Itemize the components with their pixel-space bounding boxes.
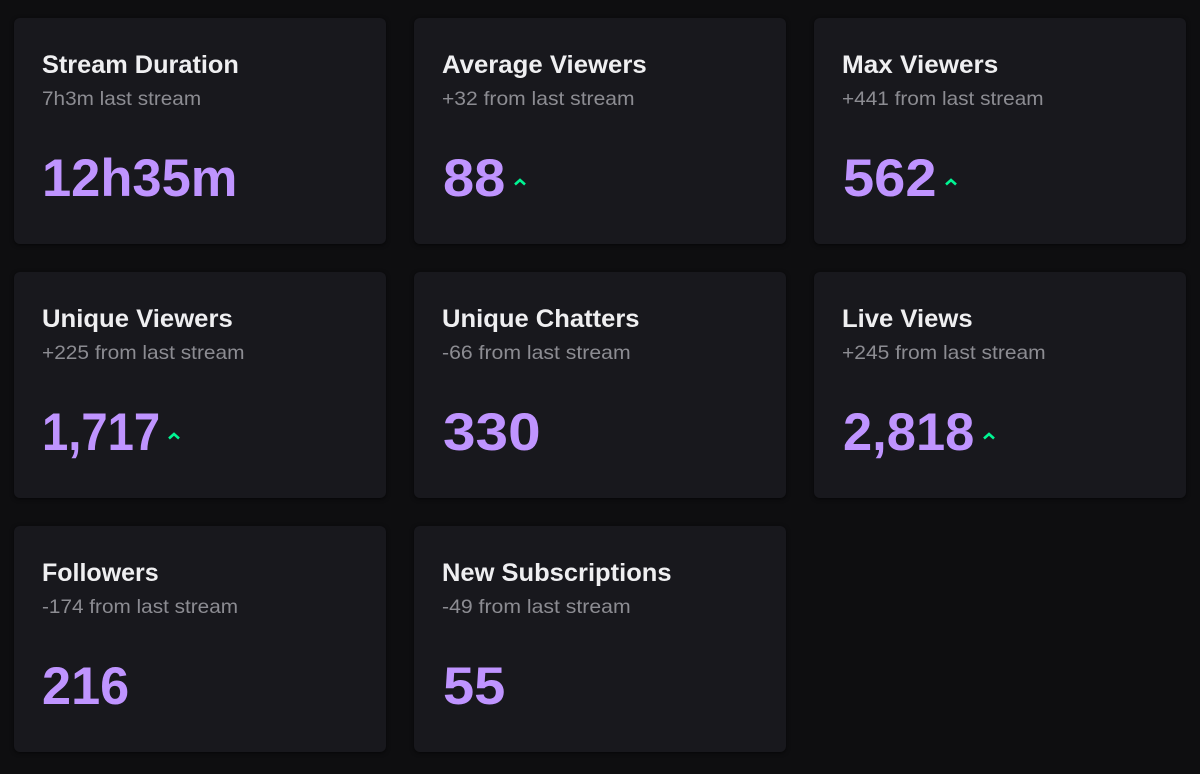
panel: Followers bbox=[14, 526, 386, 752]
heading: Live Views bbox=[842, 305, 973, 333]
icon: green up arrow bbox=[983, 432, 995, 440]
panel: Unique Chatters bbox=[414, 272, 786, 498]
comparison text: -49 from last stream bbox=[442, 596, 631, 618]
panel: Unique Viewers bbox=[14, 272, 386, 498]
icon: green up arrow bbox=[514, 178, 526, 186]
panel: New Subscriptions bbox=[414, 526, 786, 752]
heading: New Subscriptions bbox=[442, 559, 672, 587]
icon: green up arrow bbox=[168, 432, 180, 440]
value: 12h35m bbox=[42, 149, 237, 208]
value: 330 bbox=[443, 403, 541, 462]
comparison text: -174 from last stream bbox=[42, 596, 238, 618]
comparison text: +245 from last stream bbox=[842, 342, 1046, 364]
icon: green up arrow bbox=[945, 178, 957, 186]
panel: Max Viewers bbox=[814, 18, 1186, 244]
heading: Followers bbox=[42, 559, 159, 587]
value: 55 bbox=[443, 657, 505, 716]
panel: Live Views bbox=[814, 272, 1186, 498]
heading: Unique Chatters bbox=[442, 305, 640, 333]
comparison text: +225 from last stream bbox=[42, 342, 245, 364]
comparison text: 7h3m last stream bbox=[42, 88, 201, 110]
comparison text: +32 from last stream bbox=[442, 88, 635, 110]
value: 88 bbox=[443, 149, 505, 208]
value: 1,717 bbox=[42, 403, 160, 462]
panel: Average Viewers bbox=[414, 18, 786, 244]
value: 562 bbox=[843, 149, 937, 208]
value: 216 bbox=[42, 657, 129, 716]
heading: Max Viewers bbox=[842, 51, 998, 79]
heading: Average Viewers bbox=[442, 51, 647, 79]
comparison text: +441 from last stream bbox=[842, 88, 1044, 110]
value: 2,818 bbox=[843, 403, 974, 462]
comparison text: -66 from last stream bbox=[442, 342, 631, 364]
heading: Unique Viewers bbox=[42, 305, 233, 333]
heading: Stream Duration bbox=[42, 51, 239, 79]
panel: Stream Duration bbox=[14, 18, 386, 244]
